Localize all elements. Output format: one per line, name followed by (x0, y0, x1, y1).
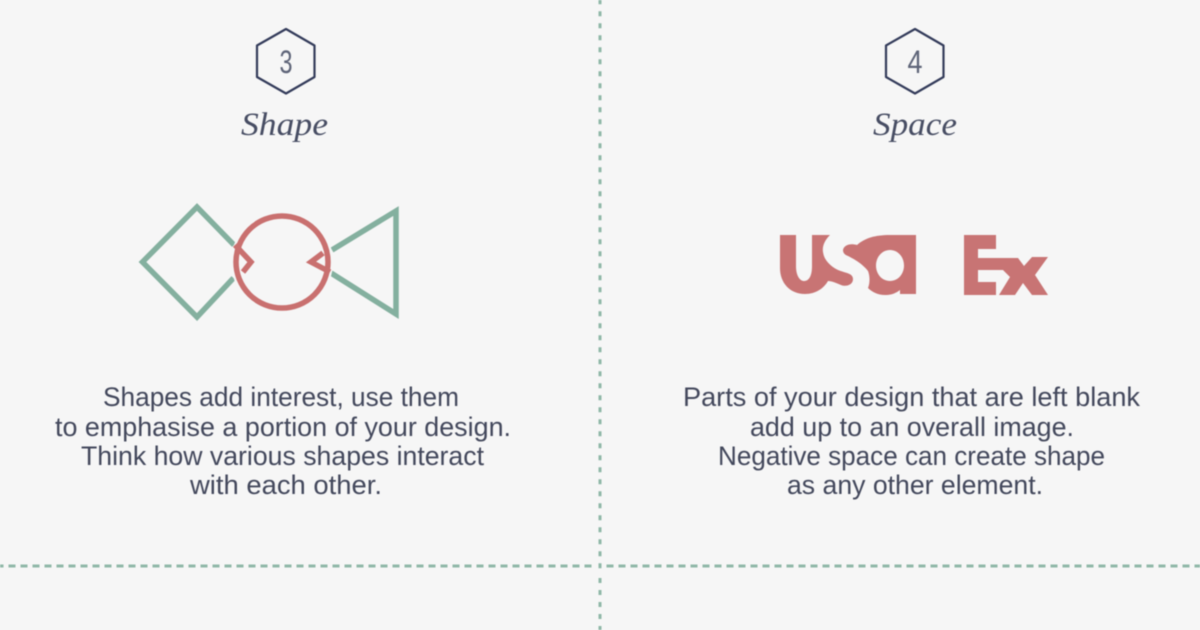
text block: shape description: Think how various shapes interact (81, 441, 484, 471)
panel: space (683, 29, 1140, 500)
text block: shape description: Shapes add interest, use them (103, 382, 459, 412)
text block: space description: Negative space can create shape (718, 441, 1105, 471)
text block: space description: add up to an overall image. (750, 412, 1074, 442)
heading: Space: Space (873, 107, 957, 143)
logo: usa (780, 235, 916, 295)
icon: hexagon number 4: 4 (908, 44, 922, 80)
text block: space description (683, 382, 1140, 500)
text block: space description: as any other element. (787, 470, 1043, 500)
text block: shape description (55, 382, 511, 500)
icon: hexagon number 3 (257, 29, 314, 94)
illustration: interlocking diamond, circle and triangle (142, 207, 396, 317)
text block: space description: Parts of your design that are left blank (683, 382, 1140, 412)
text block: shape description: with each other. (189, 470, 382, 500)
logo: Ex (964, 235, 1048, 295)
heading: Shape: Shape (241, 107, 328, 143)
text block: shape description: to emphasise a portion of your design. (55, 412, 511, 442)
icon: hexagon number 4 (886, 29, 944, 94)
icon: hexagon number 3: 3 (280, 44, 292, 80)
panel: shape (55, 29, 511, 500)
